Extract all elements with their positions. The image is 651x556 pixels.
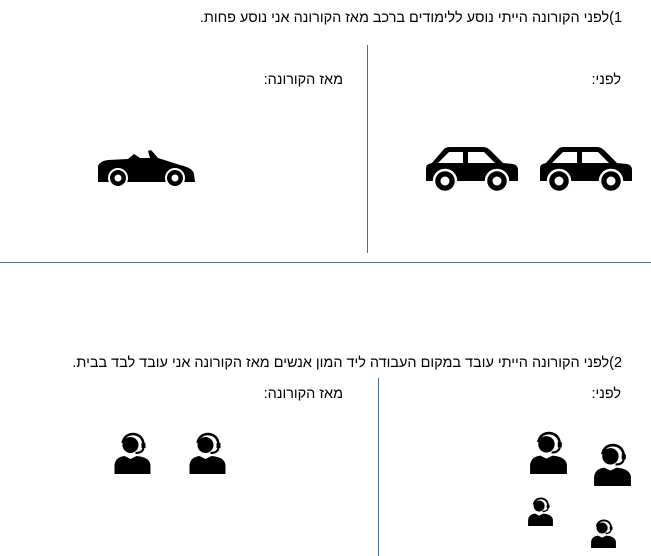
label: before 1: לפני: (591, 72, 621, 88)
label: before 2: לפני: (591, 386, 621, 402)
label: since 2: מאז הקורונה: (264, 386, 343, 402)
icon: car 1 (426, 147, 518, 192)
heading 2: 2)לפני הקורונה הייתי עובד במקום העבודה ליד המון אנשים מאז הקורונה אני עובד לבד בבית. (72, 355, 622, 371)
icon: person before 2 (594, 445, 631, 486)
icon: person before 4 (591, 520, 616, 548)
icon: person since 2 (190, 434, 226, 474)
icon: person before 3 (528, 498, 553, 526)
icon: person since 1 (114, 434, 150, 474)
icon: person before 1 (530, 433, 567, 474)
icon: car 2 (540, 147, 632, 192)
label: since 1: מאז הקורונה: (264, 72, 343, 88)
icon: convertible car (98, 150, 195, 187)
heading 1: 1)לפני הקורונה הייתי נוסע ללימודים ברכב מאז הקורונה אני נוסע פחות. (200, 10, 622, 26)
